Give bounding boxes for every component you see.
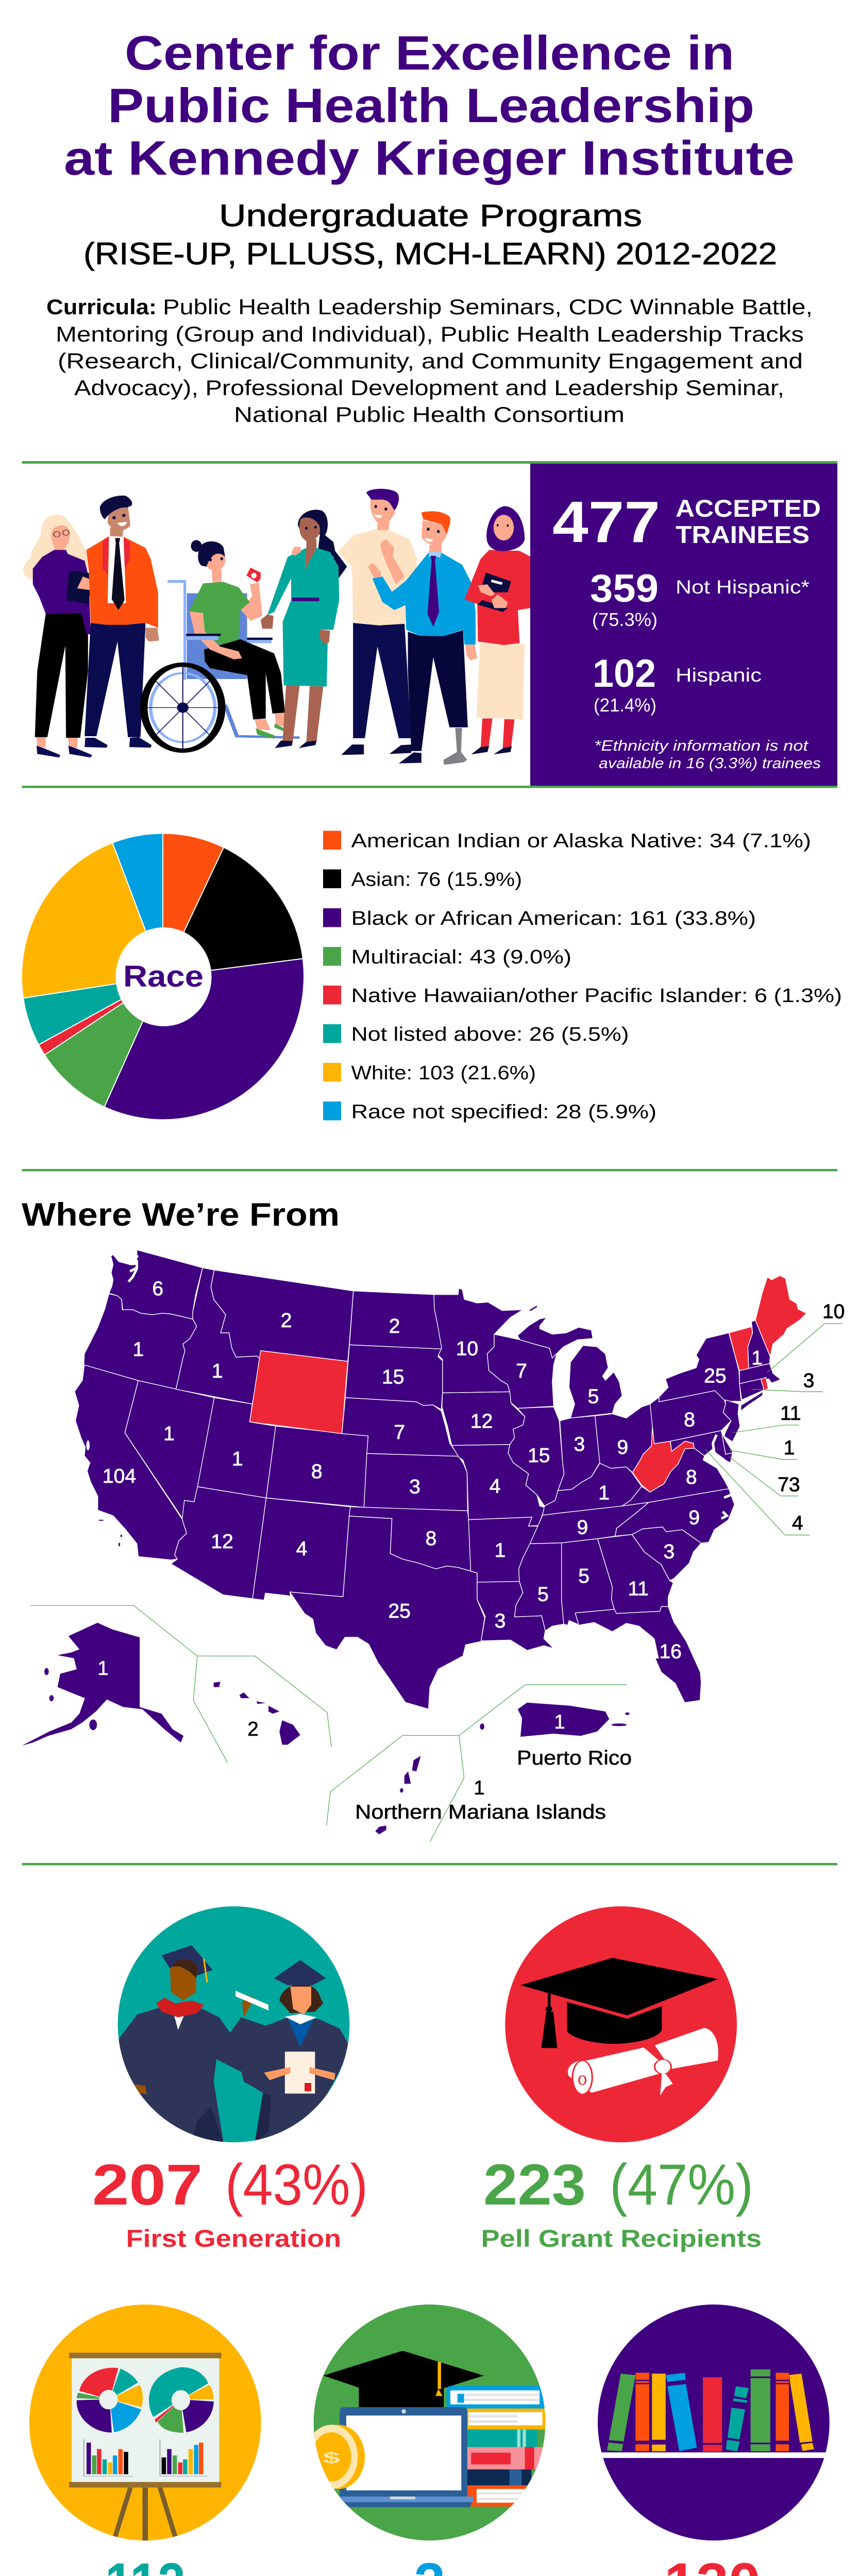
callouts: small east coast states: 3 [803, 1370, 814, 1392]
stat: pell grant recipients: 223 [483, 2153, 586, 2217]
person: blonde woman [23, 514, 93, 757]
state counts: east: 1 [751, 1347, 763, 1369]
state counts: east: 5 [588, 1386, 599, 1408]
title: at Kennedy Krieger Institute [64, 131, 795, 185]
legend: race: Not listed above: 26 (5.5%) [351, 1024, 629, 1045]
state counts: east: 5 [578, 1565, 589, 1587]
state counts: west: 25 [388, 1600, 411, 1622]
legend: race: American Indian or Alaska Native: 34 (7.1%) [351, 831, 811, 852]
state counts: west [103, 1278, 436, 1622]
subtitle: (RISE-UP, PLLUSS, MCH-LEARN) 2012-2022 [83, 236, 777, 271]
stat: 359 not Hispanic: Not Hispanic* [676, 577, 810, 598]
labels: map insets [97, 1657, 632, 1823]
legend: race: Native Hawaiian/other Pacific Islander: 6 (1.3%) [351, 985, 842, 1007]
state counts: west: 1 [212, 1360, 223, 1382]
state counts: east: 8 [684, 1409, 695, 1431]
legend: race: Multiracial: 43 (9.0%) [351, 946, 571, 968]
person: woman in teal dress [261, 510, 347, 748]
state counts: west: 1 [163, 1423, 175, 1445]
state counts: east: 3 [495, 1610, 506, 1632]
state counts: east: 15 [528, 1445, 550, 1467]
state counts: east: 3 [574, 1433, 585, 1455]
state counts: east: 25 [704, 1365, 727, 1387]
stat circle: graduation cap and diploma [505, 1906, 737, 2142]
stat: first generation: (43%) [225, 2153, 368, 2217]
state counts: east: 5 [537, 1583, 549, 1605]
state counts: east: 4 [490, 1476, 501, 1498]
inset: Puerto Rico [480, 1703, 630, 1737]
chart: race donut: Race [123, 960, 204, 993]
state counts: east: 8 [686, 1466, 697, 1488]
curricula text block: (Research, Clinical/Community, and Community Engagement and [58, 349, 803, 373]
state counts: west: 1 [232, 1448, 243, 1470]
state counts: west: 4 [296, 1538, 307, 1560]
state counts: east: 11 [628, 1578, 649, 1600]
stat: 102 Hispanic: 102 [593, 652, 656, 696]
stat: pell grant recipients [481, 2153, 762, 2252]
subtitle: Undergraduate Programs [219, 198, 642, 233]
inset: Hawaii [214, 1682, 300, 1745]
state counts: east [456, 1337, 763, 1663]
labels: map insets: Puerto Rico [517, 1747, 632, 1769]
inset: Alaska [22, 1623, 183, 1745]
labels: map insets: Northern Mariana Islands [355, 1801, 606, 1823]
state counts: east: 1 [495, 1539, 506, 1562]
person: woman in hijab [464, 506, 531, 754]
stat circle: laptop and books: $ [323, 2449, 340, 2467]
legend: race: Asian: 76 (15.9%) [351, 869, 522, 891]
stat: 102 Hispanic [593, 652, 762, 716]
map: eastern states [434, 1276, 845, 1703]
stat: first generation: First Generation [126, 2225, 341, 2252]
state counts: east: 3 [664, 1540, 675, 1563]
state counts: west: 8 [426, 1528, 436, 1550]
footnote: ethnicity: available in 16 (3.3%) trainees [599, 755, 821, 772]
state counts: east: 9 [688, 1506, 700, 1529]
state counts: east: 9 [577, 1516, 588, 1538]
stat: first generation: 207 [92, 2153, 203, 2217]
stat: pell grant recipients: Pell Grant Recipients [481, 2225, 762, 2252]
subtitle [83, 198, 777, 271]
illustration: group of diverse people [23, 489, 531, 765]
state counts: east: 1 [598, 1482, 610, 1504]
person: man in blue shirt with prosthetic leg [368, 511, 477, 765]
footnote: ethnicity [594, 738, 821, 772]
inset: Northern Mariana Islands [375, 1756, 421, 1834]
stat circle: bookshelf [597, 2304, 830, 2540]
stat circle: graduates [118, 1906, 350, 2143]
person: man in orange blazer [85, 496, 159, 748]
callouts: small east coast states: 11 [780, 1402, 801, 1425]
callouts: small east coast states [705, 1300, 845, 1535]
stat circle: laptop and books [305, 2304, 545, 2540]
stat: first generation [92, 2153, 368, 2252]
stat: 359 not Hispanic: (75.3%) [592, 609, 658, 630]
stat: 477 accepted trainees: TRAINEES [676, 521, 810, 548]
legend: race: Black or African American: 161 (33.8%) [351, 908, 756, 929]
curricula text block: Advocacy), Professional Development and Leadership Seminar, [74, 376, 784, 400]
stat: 102 Hispanic: Hispanic [676, 665, 762, 686]
state counts: west: 8 [311, 1461, 323, 1483]
pie right [149, 2367, 208, 2417]
state counts: west: 12 [211, 1531, 233, 1553]
state counts: west: 15 [382, 1366, 404, 1388]
state counts: west: 2 [281, 1310, 292, 1332]
stat: 359 not Hispanic [590, 567, 810, 630]
callouts: small east coast states: 1 [784, 1437, 795, 1459]
state counts: west: 2 [389, 1315, 400, 1337]
state counts: west: 104 [103, 1465, 136, 1487]
callouts: small east coast states: 10 [822, 1300, 845, 1323]
chart: race donut [22, 834, 304, 1120]
person: woman in wheelchair [144, 540, 299, 753]
bars [84, 2439, 208, 2476]
stat: 477 accepted trainees: ACCEPTED [676, 495, 821, 522]
title [64, 26, 795, 185]
heading: where we're from: Where We’re From [22, 1197, 340, 1233]
stat: 477 accepted trainees: 477 [552, 489, 660, 554]
state counts: west: 6 [152, 1278, 163, 1300]
state counts: west: 7 [394, 1421, 405, 1444]
curricula text block: Curricula: [46, 295, 157, 319]
curricula text block [46, 295, 813, 427]
pie left [79, 2368, 119, 2399]
curricula text block: Mentoring (Group and Individual), Public Health Leadership Tracks [56, 322, 804, 346]
labels: map insets: 1 [97, 1657, 109, 1680]
legend: race: White: 103 (21.6%) [351, 1062, 536, 1084]
state counts: east: 16 [659, 1641, 682, 1663]
map: western states [75, 1250, 485, 1709]
stat: 102 Hispanic: (21.4%) [594, 694, 656, 716]
callouts: small east coast states: 73 [778, 1473, 800, 1496]
labels: map insets: 1 [474, 1777, 485, 1799]
curricula text block: Public Health Leadership Seminars, CDC Winnable Battle, [163, 295, 813, 319]
stat: pell grant recipients: (47%) [610, 2153, 753, 2217]
panel: accepted trainees [530, 464, 837, 786]
footnote: ethnicity: *Ethnicity information is not [594, 738, 809, 754]
stat circle: presentation board [29, 2304, 261, 2541]
labels: map insets: 1 [554, 1711, 565, 1733]
state counts: east: 12 [470, 1410, 493, 1432]
state counts: east: 10 [456, 1337, 478, 1360]
stat: 477 accepted trainees [552, 489, 821, 554]
curricula text block: National Public Health Consortium [234, 402, 625, 427]
labels: map insets: 2 [247, 1718, 259, 1740]
stat: 359 not Hispanic: 359 [590, 567, 659, 611]
map: Alaska, Hawaii, territories [22, 1605, 630, 1841]
title: Public Health Leadership [108, 78, 754, 132]
state counts: west: 3 [409, 1476, 420, 1498]
title: Center for Excellence in [125, 26, 734, 80]
state counts: west: 1 [132, 1338, 144, 1361]
person: man in cream shirt [291, 489, 417, 755]
state counts: east: 9 [617, 1436, 628, 1459]
legend: race: Race not specified: 28 (5.9%) [351, 1101, 656, 1123]
state counts: east: 7 [516, 1360, 527, 1382]
legend: race [323, 831, 842, 1123]
callouts: small east coast states: 4 [792, 1512, 803, 1534]
